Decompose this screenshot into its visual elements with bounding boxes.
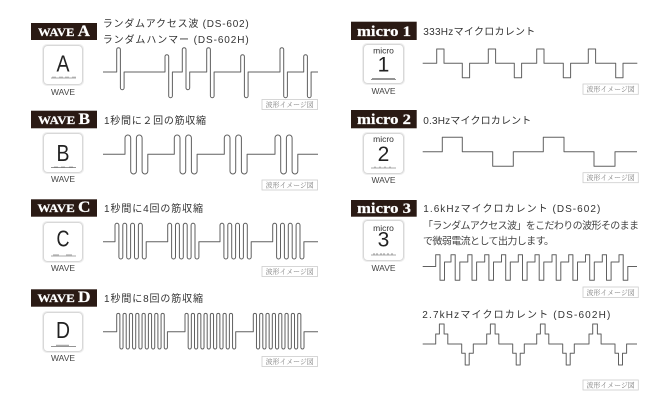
icon: WAVE C button [42, 221, 84, 273]
waveform: micro 1 [423, 49, 637, 78]
panel: 2.7kHz micro current [422, 309, 638, 390]
icon: micro 1 button [362, 43, 405, 96]
heading: WAVE B description: 1秒間に２回の筋収縮 [104, 114, 206, 127]
tag: waveform image note: 波形イメージ図 [587, 288, 635, 297]
tag: waveform image note: 波形イメージ図 [266, 267, 314, 276]
icon: micro 1 button: 1 [378, 54, 389, 77]
heading: WAVE D description: 1秒間に8回の筋収縮 [104, 292, 203, 305]
icon: micro 1 button: WAVE [372, 86, 396, 96]
tag: waveform image note [583, 84, 638, 94]
icon: micro 2 button: WAVE [372, 175, 396, 185]
label: micro 3: micro 3 [357, 201, 411, 217]
tag: waveform image note: 波形イメージ図 [266, 180, 314, 190]
label: micro 1 [351, 22, 417, 40]
text block: micro 3 explanation: で微弱電流として出力します。 [423, 234, 554, 248]
heading: WAVE C description: 1秒間に4回の筋収縮 [104, 202, 203, 215]
icon: WAVE A button: WAVE [51, 87, 75, 97]
tag: waveform image note: 波形イメージ図 [266, 357, 314, 366]
icon: WAVE B button: B [56, 140, 70, 166]
icon: WAVE B button [42, 132, 84, 184]
text block: micro 3 explanation [423, 219, 639, 248]
tag: waveform image note [583, 287, 638, 298]
icon: micro 3 button: micro [373, 223, 394, 233]
icon: WAVE D button: WAVE [51, 353, 75, 363]
icon: WAVE A button: A [56, 51, 70, 77]
icon: micro 3 button: WAVE [372, 263, 396, 273]
label: WAVE A: WAVE A [38, 23, 90, 40]
heading: 2.7kHz description: 2.7kHzマイクロカレント (DS-602H) [422, 309, 610, 321]
panel: WAVE D [31, 289, 318, 366]
panel: micro 3 [351, 200, 639, 298]
tag: waveform image note: 波形イメージ図 [587, 380, 635, 390]
tag: waveform image note: 波形イメージ図 [266, 100, 314, 109]
panel: WAVE B [31, 111, 318, 190]
icon: micro 3 button: 3 [378, 229, 389, 252]
heading: micro 3 description: 1.6kHzマイクロカレント (DS-602) [423, 203, 600, 215]
icon: micro 2 button [362, 132, 405, 185]
text block: micro 3 explanation: 「ランダムアクセス波」をこだわりの波形そのまま [423, 219, 639, 232]
label: micro 2: micro 2 [357, 112, 411, 128]
waveform: micro 2 [423, 137, 637, 166]
icon: WAVE C button: WAVE [51, 263, 75, 273]
icon: micro 3 button [362, 219, 405, 273]
heading: micro 2 description: 0.3Hzマイクロカレント [423, 115, 531, 127]
waveform: 2.7kHz [423, 324, 637, 365]
icon: micro 2 button: micro [373, 134, 394, 144]
heading: WAVE A description [103, 17, 249, 46]
label: WAVE D: WAVE D [38, 289, 90, 306]
label: micro 1: micro 1 [357, 24, 411, 40]
icon: micro 2 button: 2 [378, 143, 389, 166]
waveform: WAVE D [103, 313, 318, 349]
panel: WAVE A [31, 17, 318, 110]
label: micro 3 [351, 200, 417, 217]
icon: micro 1 button: micro [373, 46, 394, 56]
label: WAVE B: WAVE B [38, 111, 90, 128]
icon: WAVE C button: C [56, 226, 70, 252]
icon: WAVE B button: WAVE [51, 174, 75, 184]
tag: waveform image note: 波形イメージ図 [587, 85, 635, 94]
label: WAVE C: WAVE C [38, 199, 90, 216]
waveform: WAVE A [103, 48, 318, 98]
tag: waveform image note: 波形イメージ図 [587, 173, 635, 182]
icon: WAVE D button: D [56, 317, 70, 343]
icon: WAVE D button [42, 311, 84, 363]
panel: WAVE C [31, 199, 318, 276]
panel: micro 1 [351, 22, 638, 96]
heading: WAVE A description: ランダムハンマー (DS-602H) [103, 33, 249, 46]
panel: micro 2 [351, 110, 638, 185]
waveform: 1.6kHz [423, 255, 637, 280]
waveform: WAVE B [103, 135, 318, 174]
label: micro 2 [351, 110, 417, 128]
icon: WAVE A button [42, 44, 84, 97]
heading: WAVE A description: ランダムアクセス波 (DS-602) [103, 17, 249, 30]
waveform: WAVE C [103, 223, 318, 259]
heading: micro 1 description: 333Hzマイクロカレント [423, 26, 535, 38]
